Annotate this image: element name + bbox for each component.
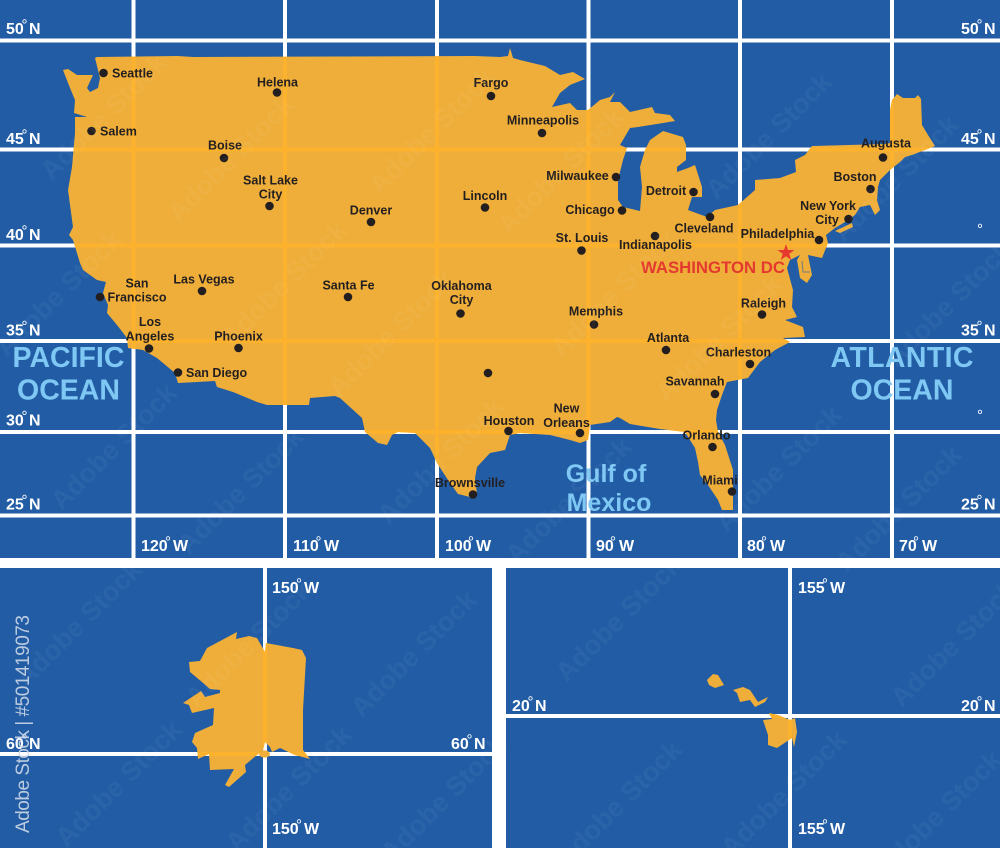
land: Maui group [733,687,768,707]
Hawaii coordinate labels: ° [528,694,534,710]
city labels [100,66,912,490]
city labels: Salt Lake [243,174,298,188]
watermark pattern: Adobe Stock [162,89,300,228]
ocean label: Pacific: OCEAN [17,374,120,406]
longitude labels: W [619,538,635,555]
longitude labels: W [324,538,340,555]
panel: Alaska inset [0,568,492,848]
watermark pattern: Adobe Stock [345,584,483,723]
Hawaii coordinate labels [512,576,996,838]
longitude labels: ° [468,534,474,550]
Alaska coordinate labels: N [474,736,486,753]
city labels: Fargo [474,76,509,90]
ocean label: Atlantic: ATLANTIC [830,342,974,374]
latitude labels right: N [984,21,996,38]
Alaska coordinate labels: W [304,580,320,597]
ocean label: Atlantic [830,342,974,406]
Hawaii coordinate labels: ° [976,694,982,710]
land: Alaska [183,632,310,787]
city labels: Orleans [543,416,590,430]
city labels: Salem [100,124,137,138]
latitude labels right: ° [976,16,982,34]
latitude labels left: 25 [6,496,24,514]
city labels: Phoenix [214,330,263,344]
city labels: Oklahoma [431,279,493,293]
longitude labels: 100 [445,538,472,555]
Hawaii coordinate labels: N [984,698,996,715]
latitude labels left: 35 [6,322,24,340]
latitude labels right: 45 [961,131,979,148]
longitude labels [141,534,938,555]
land: Big Island [763,713,797,748]
watermark pattern: Adobe Stock [700,66,838,205]
latitude labels left: N [29,412,41,430]
Alaska coordinate labels: ° [296,576,302,592]
longitude labels: ° [165,534,171,550]
longitude labels: ° [610,534,616,550]
watermark pattern: Adobe Stock [827,109,965,248]
latitude labels left: ° [22,16,28,34]
Alaska coordinate labels: ° [466,732,472,748]
land: contiguous United States [63,48,935,510]
sea label: Gulf of Mexico: Gulf of [566,460,647,488]
longitude labels: W [922,538,938,555]
Hawaii coordinate labels: 20 [512,698,530,715]
city labels: Lincoln [463,189,507,203]
latitude labels right: ° [977,407,983,424]
latitude labels right: 50 [961,21,979,38]
Hawaii coordinate labels: 155 [798,821,825,838]
Hawaii coordinate labels: ° [822,816,828,834]
capital star marker [778,244,794,260]
longitude labels: ° [316,534,322,550]
sea label: Gulf of Mexico: Mexico [567,489,651,517]
city labels: Francisco [107,290,167,304]
Alaska coordinate labels: ° [296,816,302,834]
capital label: WASHINGTON DC [641,259,785,277]
city labels: Miami [702,474,738,488]
Alaska grid over land [197,643,308,756]
grid lines: latitude and longitude [0,0,1000,558]
watermark pattern: Adobe Stock [363,61,501,200]
city labels: City [450,293,473,307]
vertical watermark credit: Adobe Stock | #501419073 [13,615,34,833]
watermark pattern: Adobe Stock [322,264,460,403]
watermark pattern: Adobe Stock [545,224,683,363]
Hawaii coordinate labels: 155 [798,580,825,597]
city labels: St. Louis [556,231,608,245]
city labels: Cleveland [674,222,734,236]
latitude labels left: N [29,21,41,38]
city labels: Seattle [112,66,153,80]
land: Kauai [707,674,724,688]
watermark pattern: Adobe Stock [35,47,173,186]
Delmarva inlet mark [802,261,810,272]
Hawaii coordinate labels: N [535,698,547,715]
city labels: San Diego [186,366,247,380]
Hawaii coordinate labels: ° [822,576,828,592]
Alaska coordinate labels: 150 [272,821,299,838]
latitude labels left: ° [22,222,28,240]
latitude labels left: 50 [6,21,24,38]
longitude labels: W [476,538,492,555]
Alaska coordinate labels: 60 [6,736,24,753]
Alaska coordinate labels: W [304,821,320,838]
ocean label: Pacific: PACIFIC [13,342,124,374]
watermark pattern: Adobe Stock [500,431,638,570]
latitude labels left: N [29,227,41,244]
ocean label: Pacific [13,342,124,406]
city labels: Philadelphia [741,227,815,241]
Hawaii coordinate labels: W [830,821,846,838]
city labels: City [259,188,282,202]
watermark pattern: Adobe Stock [10,554,148,693]
latitude labels right: 35 [961,322,979,340]
Long Island [835,223,853,233]
latitude labels left: N [29,131,41,148]
city labels: Los [139,315,161,329]
longitude labels: W [173,538,189,555]
latitude labels right: ° [976,126,982,144]
city labels: City [815,213,839,227]
Alaska coordinate labels: N [29,736,41,753]
longitude labels: ° [761,534,767,550]
Kodiak island [259,750,270,758]
longitude labels: 120 [141,538,168,555]
latitude labels right: 25 [961,496,979,514]
longitude labels: 80 [747,538,765,555]
city labels: New [554,402,580,416]
ocean label: Atlantic: OCEAN [851,374,953,406]
watermark pattern: Adobe Stock [215,214,353,353]
watermark pattern: Adobe Stock [550,549,688,688]
city labels: Raleigh [741,296,786,310]
panel: Hawaii inset [506,568,1000,848]
latitude labels left: 40 [6,227,24,244]
city labels: Santa Fe [322,278,375,292]
Alaska coordinate labels: 150 [272,580,299,597]
city labels: Houston [484,414,534,428]
city labels: Boise [208,138,242,152]
watermark pattern: Adobe Stock [710,399,848,538]
longitude labels: ° [913,534,919,550]
latitude labels left: N [29,496,41,514]
city labels: Memphis [569,304,623,318]
sea label: Gulf of Mexico [566,460,651,517]
Hawaii coordinate labels: W [830,580,846,597]
latitude labels left: ° [22,126,28,144]
grid lines over land [73,56,932,466]
panel: contiguous United States map [0,0,1000,558]
watermark pattern: Adobe Stock [650,269,788,408]
city labels: Atlanta [647,331,690,345]
city labels: Brownsville [435,476,505,490]
Alaska coordinate labels: ° [22,732,28,748]
latitude labels left: ° [22,408,28,425]
longitude labels: 90 [596,538,614,555]
latitude labels right: ° [977,221,983,238]
city labels: Minneapolis [507,114,579,128]
latitude labels left: ° [22,492,28,509]
Hawaii coordinate labels: 20 [961,698,979,715]
watermark pattern: Adobe Stock [45,377,183,516]
latitude labels left: N [29,322,41,340]
city labels: New York [800,199,856,213]
city labels: Augusta [861,136,912,150]
latitude labels right: N [984,322,996,340]
latitude labels left: 45 [6,131,24,148]
latitude labels right: ° [976,318,982,335]
city labels: Milwaukee [546,169,609,183]
latitude labels left: ° [22,318,28,335]
watermark pattern: Adobe Stock [180,574,318,713]
Hawaii grid lines [506,568,1000,848]
longitude labels: W [770,538,786,555]
latitude labels left [6,16,41,514]
city labels: Orlando [683,428,731,442]
watermark pattern: Adobe Stock [492,101,630,240]
city labels: Charleston [706,346,771,360]
Alaska coordinate labels: 60 [451,736,469,753]
watermark pattern: Adobe Stock [172,421,310,560]
city labels: Las Vegas [173,272,235,286]
longitude labels: 70 [899,538,917,555]
latitude labels right [961,16,996,514]
city labels: Boston [833,170,877,184]
panel dividers [0,558,1000,848]
watermark pattern: Adobe Stock [830,439,968,578]
city labels: Angeles [126,330,174,344]
city labels: Denver [350,204,392,218]
city labels: Detroit [646,184,687,198]
longitude labels: 110 [293,538,319,555]
Hawaii grid over land [770,714,792,741]
latitude labels left: 30 [6,412,24,430]
city labels: Helena [257,76,299,90]
latitude labels right: N [984,496,996,514]
Alaska coordinate labels [6,576,486,838]
city labels: San [126,276,148,290]
city labels: Indianapolis [619,238,692,252]
city markers [87,69,887,499]
watermark pattern: Adobe Stock [372,391,510,530]
Alaska grid lines [0,568,492,848]
city labels: Chicago [565,203,615,217]
latitude labels right: N [984,131,996,148]
city labels: Savannah [665,374,725,388]
latitude labels right: ° [976,492,982,509]
